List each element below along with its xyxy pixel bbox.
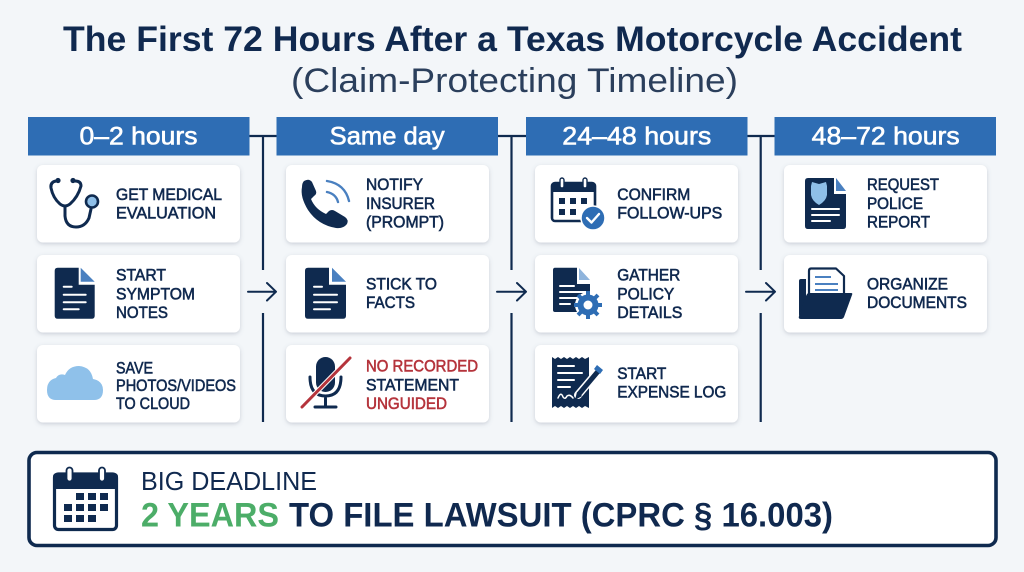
card: organize documents: DOCUMENTS bbox=[867, 293, 967, 312]
icon: folder with documents bbox=[799, 268, 852, 319]
header: 0-2 hours bbox=[28, 117, 250, 156]
text: deadline statement: TO FILE LAWSUIT (CPRC § 16.003) bbox=[289, 497, 833, 535]
card: request police report: REPORT bbox=[867, 213, 930, 232]
panel: 48-72 hours bbox=[774, 117, 996, 332]
icon: crossed-out microphone bbox=[302, 357, 350, 407]
card: start expense log bbox=[535, 345, 738, 422]
card: no recorded statement: UNGUIDED bbox=[366, 394, 447, 413]
card: confirm follow-ups: FOLLOW-UPS bbox=[617, 204, 722, 223]
text: big deadline label: BIG DEADLINE bbox=[141, 466, 317, 496]
card: start symptom notes bbox=[37, 255, 240, 332]
card: gather policy details: DETAILS bbox=[617, 303, 682, 322]
card: stick to facts: STICK TO bbox=[366, 274, 437, 293]
card: no recorded statement: STATEMENT bbox=[366, 376, 459, 395]
card: no recorded statement: NO RECORDED bbox=[366, 357, 478, 376]
card: notify insurer: (PROMPT) bbox=[366, 213, 444, 232]
card: confirm follow-ups: CONFIRM bbox=[617, 185, 690, 204]
panel: 24-48 hours bbox=[526, 117, 748, 422]
icon: document bbox=[305, 268, 346, 319]
text: deadline statement: 2 YEARS bbox=[141, 497, 279, 535]
card: request police report bbox=[784, 165, 987, 242]
card: confirm follow-ups bbox=[535, 165, 738, 242]
panel: 0-2 hours bbox=[28, 117, 250, 422]
icon: calendar with check bbox=[552, 178, 605, 230]
card: gather policy details: GATHER bbox=[617, 266, 680, 285]
header: 0-2 hours: 0–2 hours bbox=[80, 122, 198, 150]
header: 48-72 hours: 48–72 hours bbox=[812, 122, 960, 150]
card: stick to facts: FACTS bbox=[366, 293, 415, 312]
title: The First 72 Hours After a Texas Motorcycle Accident bbox=[63, 20, 962, 59]
arrow: 0-2 hours to same day bbox=[248, 283, 276, 300]
card: notify insurer: NOTIFY bbox=[366, 175, 423, 194]
card: start expense log: EXPENSE LOG bbox=[617, 382, 726, 401]
icon: cloud bbox=[47, 366, 103, 400]
header: 48-72 hours bbox=[774, 117, 996, 156]
arrow: 24-48 hours to 48-72 hours bbox=[746, 283, 775, 300]
card: organize documents bbox=[784, 255, 987, 332]
card: get medical evaluation: GET MEDICAL bbox=[116, 185, 222, 204]
card: notify insurer bbox=[286, 165, 489, 242]
card: save photos/videos to cloud: TO CLOUD bbox=[116, 394, 190, 413]
card: save photos/videos to cloud: SAVE bbox=[116, 358, 153, 377]
card: save photos/videos to cloud: PHOTOS/VIDEOS bbox=[116, 376, 236, 395]
icon: calendar bbox=[53, 468, 118, 530]
icon: document bbox=[55, 268, 95, 319]
card: stick to facts bbox=[286, 255, 489, 332]
header: 24-48 hours bbox=[526, 117, 748, 156]
card: start symptom notes: NOTES bbox=[116, 303, 168, 322]
card: start expense log: START bbox=[617, 364, 666, 383]
card: organize documents: ORGANIZE bbox=[867, 274, 948, 293]
arrow: same day to 24-48 hours bbox=[497, 283, 526, 300]
icon: phone bbox=[302, 180, 349, 228]
card: notify insurer: INSURER bbox=[366, 194, 435, 213]
icon: police report document bbox=[805, 178, 846, 229]
callout: big deadline bbox=[29, 452, 996, 546]
header: 24-48 hours: 24–48 hours bbox=[562, 122, 711, 150]
panel: same day bbox=[276, 117, 498, 422]
header: same day bbox=[276, 117, 498, 156]
icon: document with gear bbox=[553, 268, 602, 319]
card: save photos/videos to cloud bbox=[37, 345, 240, 422]
card: request police report: REQUEST bbox=[867, 175, 939, 194]
card: gather policy details bbox=[535, 255, 738, 332]
timeline connectors bbox=[248, 136, 775, 422]
card: start symptom notes: START bbox=[116, 266, 166, 285]
title: (Claim-Protecting Timeline) bbox=[291, 62, 738, 100]
card: request police report: POLICE bbox=[867, 194, 923, 213]
title bbox=[63, 20, 962, 100]
card: start symptom notes: SYMPTOM bbox=[116, 284, 195, 303]
icon: stethoscope bbox=[51, 178, 98, 227]
card: gather policy details: POLICY bbox=[617, 284, 674, 303]
card: get medical evaluation: EVALUATION bbox=[116, 204, 216, 223]
header: same day: Same day bbox=[330, 122, 445, 150]
card: get medical evaluation bbox=[37, 165, 240, 242]
icon: receipt with pen bbox=[552, 357, 603, 408]
card: no recorded statement bbox=[286, 345, 489, 422]
